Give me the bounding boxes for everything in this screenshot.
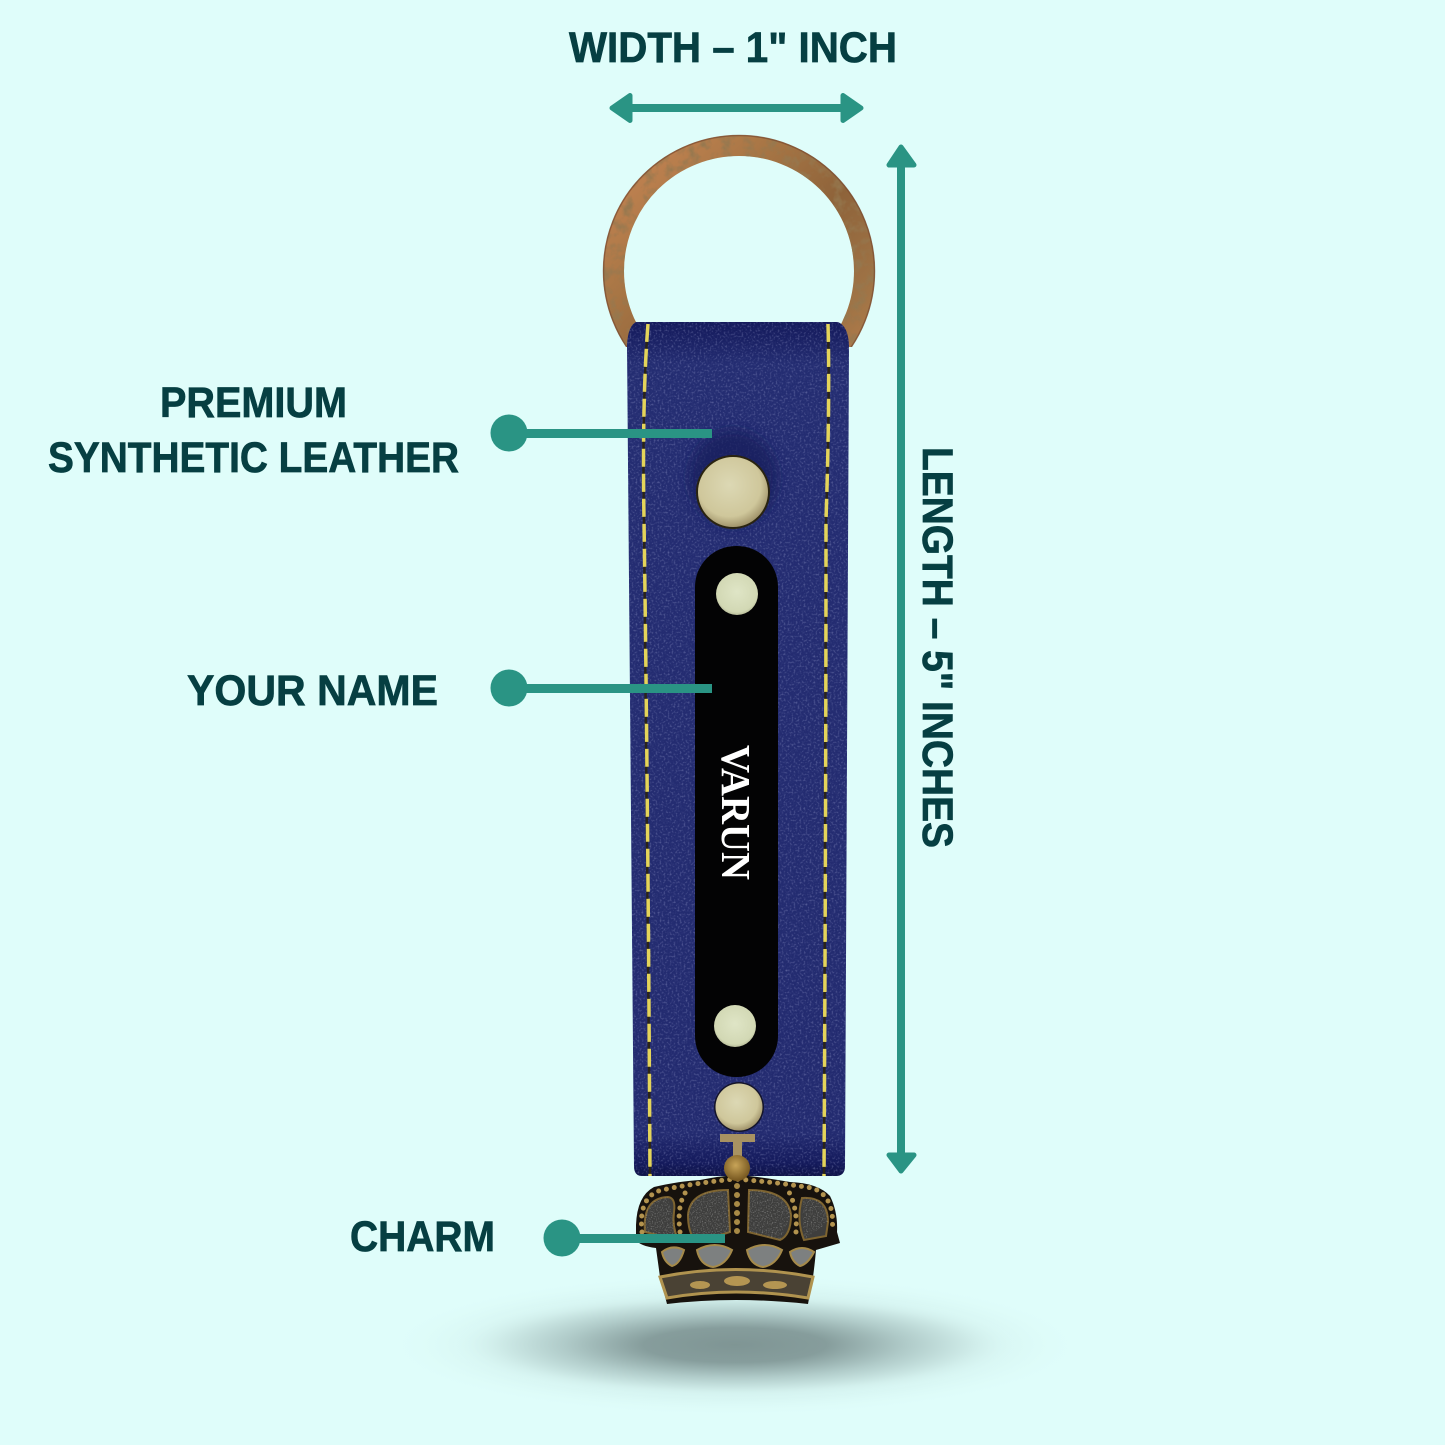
bottom rivet — [714, 1082, 764, 1132]
width label: WIDTH – 1" INCH — [569, 24, 897, 72]
crown cross — [720, 1134, 755, 1156]
right stitching — [824, 324, 829, 1176]
leather heading — [48, 379, 459, 482]
callout: charm — [350, 1213, 725, 1261]
crown orb — [724, 1155, 750, 1181]
crown base band — [660, 1270, 813, 1298]
charm pointer — [544, 1220, 725, 1256]
left stitching — [644, 324, 650, 1176]
crown arches — [645, 1190, 828, 1240]
metal key ring — [602, 134, 876, 347]
name on plate: VARUN — [713, 745, 759, 880]
charm heading: CHARM — [350, 1213, 495, 1261]
crown silhouette — [636, 1175, 840, 1304]
keychain infographic — [48, 32, 996, 1396]
length label: LENGTH – 5" INCHES — [913, 447, 961, 848]
leather pointer — [490, 414, 712, 452]
leather heading: PREMIUM — [160, 379, 347, 427]
width arrow — [612, 96, 861, 120]
rivet shadow — [689, 430, 777, 526]
plate top rivet — [716, 573, 758, 615]
length arrow — [889, 147, 914, 1171]
crown charm — [636, 1134, 840, 1304]
plate bottom rivet — [714, 1005, 756, 1047]
name heading: YOUR NAME — [187, 667, 438, 715]
black name plate — [695, 546, 778, 1077]
ground shadow — [385, 1273, 1085, 1417]
strap body — [627, 322, 849, 1176]
crown centre band — [734, 1186, 740, 1236]
leather grain — [627, 322, 849, 1176]
crown arch grain — [645, 1190, 828, 1240]
crown beading — [641, 1179, 833, 1232]
leather heading: SYNTHETIC LEATHER — [48, 434, 459, 482]
leather strap — [627, 322, 849, 1176]
callout: leather — [48, 379, 712, 482]
top rivet — [696, 455, 770, 529]
crown base ornaments — [690, 1276, 787, 1289]
crown lower scallops — [662, 1245, 814, 1267]
callout: name — [187, 667, 712, 715]
name pointer — [490, 670, 712, 706]
